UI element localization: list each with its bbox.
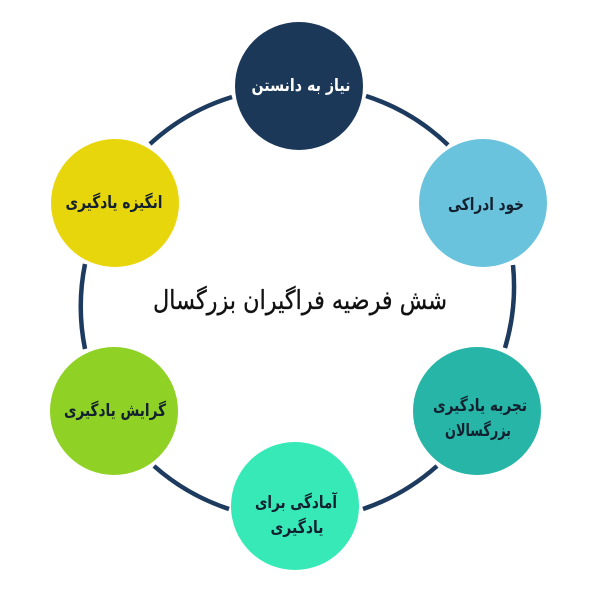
title: شش فرضیه فراگیران بزرگسال <box>153 285 447 316</box>
node: adult learning experience: تجربه یادگیری <box>433 395 527 416</box>
node: learning motivation: انگیزه یادگیری <box>66 192 162 213</box>
node: need to know <box>235 22 363 150</box>
node: readiness to learn <box>231 442 359 570</box>
node: learning orientation: گرایش یادگیری <box>64 400 166 421</box>
node: readiness to learn: آمادگی برای <box>255 491 338 513</box>
ring connector arcs <box>81 96 514 509</box>
node: readiness to learn: یادگیری <box>270 517 324 538</box>
node: learning orientation <box>50 347 178 475</box>
node: need to know: نیاز به دانستن <box>252 76 350 96</box>
node: self concept <box>419 139 547 267</box>
node: learning motivation <box>51 139 179 267</box>
node: self concept: خود ادراکی <box>448 195 524 215</box>
node: adult learning experience <box>413 347 541 475</box>
node: adult learning experience: بزرگسالان <box>445 420 511 441</box>
